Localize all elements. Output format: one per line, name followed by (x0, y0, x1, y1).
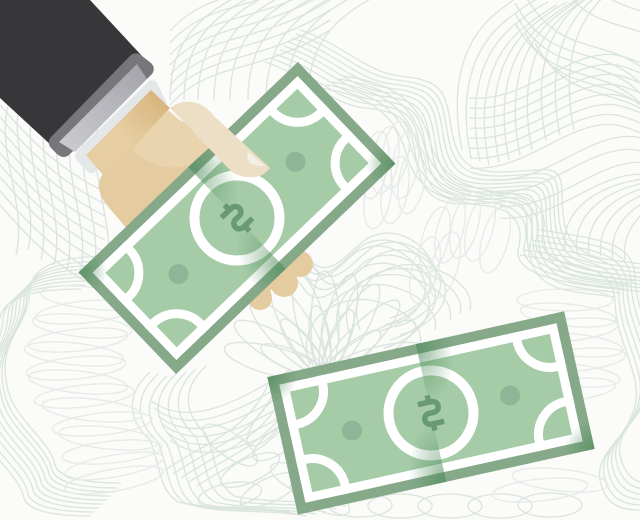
finger: lower (248, 286, 272, 310)
thumb base (132, 110, 210, 167)
dots (164, 148, 310, 288)
bill border (78, 62, 396, 374)
fold and corner shading (78, 62, 396, 374)
bill face (105, 89, 369, 347)
finger: upper (287, 251, 313, 277)
dollar sign (416, 393, 446, 433)
bill white band (93, 76, 381, 360)
finger: middle (270, 269, 298, 297)
back of hand (99, 112, 300, 300)
dollar sign (217, 197, 257, 239)
hand behind the bill (99, 112, 313, 310)
thumb over the bill (132, 102, 270, 177)
shirt cuff (75, 80, 167, 173)
central ring (177, 158, 297, 278)
thumbnail (247, 152, 265, 166)
central ring (380, 362, 482, 464)
sleeve trim (49, 53, 154, 157)
corner arcs (287, 331, 575, 495)
dots (340, 384, 522, 442)
jacket sleeve (0, 0, 142, 146)
bill: held in hand (78, 62, 396, 374)
bill white band (279, 323, 583, 503)
sleeve and cuffs (0, 0, 170, 175)
corner arcs (118, 102, 356, 334)
thumb finger (170, 102, 270, 177)
wrist (86, 90, 170, 175)
bill face (290, 334, 572, 492)
shirt cuff grey shade (59, 64, 147, 152)
fold and corner shading (267, 311, 595, 515)
bill: falling (267, 311, 595, 515)
bill border (267, 311, 595, 515)
